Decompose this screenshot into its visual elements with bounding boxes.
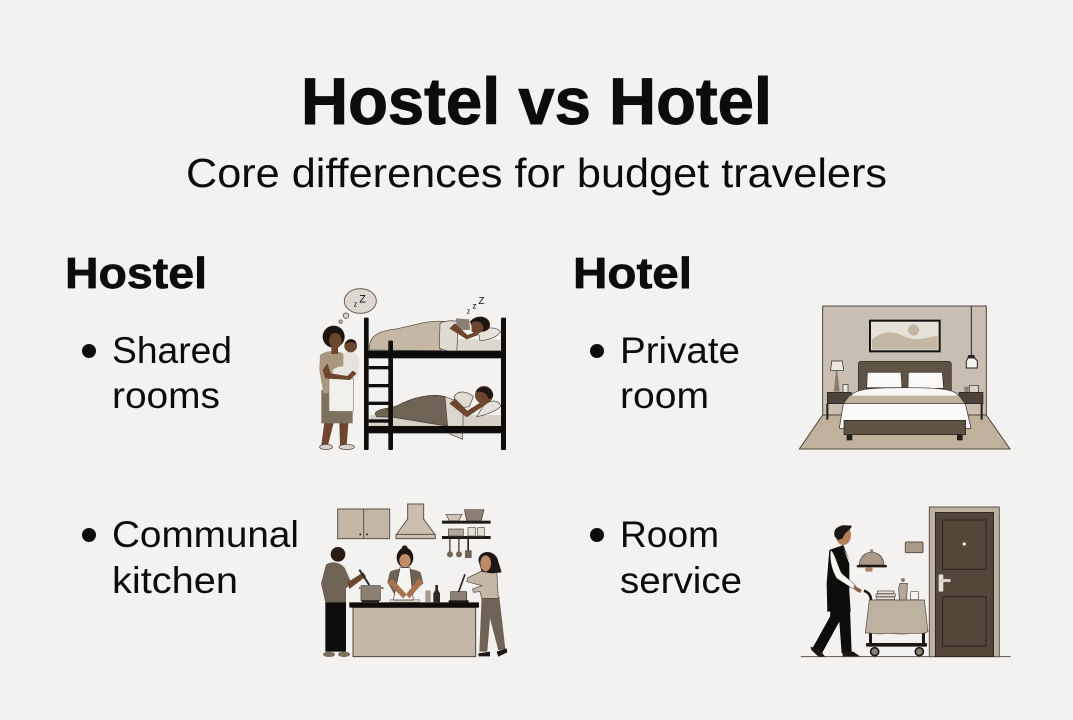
thought bubble: Z [359,294,366,306]
person center [387,545,423,600]
rug [799,415,1010,449]
person left [321,547,369,657]
range hood [396,504,435,539]
sleeping z marks: z [467,306,471,315]
bottom bunk [370,386,501,439]
bullet: communal kitchen: Communal [112,514,299,555]
bullet: room service: service [620,560,742,601]
panel: hotel [573,249,1011,657]
bullet: shared rooms: Shared [112,330,232,371]
subtitle: Core differences for budget travelers [186,150,887,196]
pendant lamp [966,306,977,368]
headboard [858,361,951,393]
icon: room service at door [801,507,1011,657]
bullet: communal kitchen: kitchen [112,560,238,601]
waiter [811,525,873,657]
floor line [801,655,1011,658]
heading: hostel: Hostel [65,249,207,298]
cart [864,578,928,656]
left nightstand with lamp [827,361,851,420]
bullet: room service: Room [620,514,719,555]
icon: communal kitchen scene [321,504,507,657]
pillows [867,372,944,388]
person right [459,552,507,657]
bed [839,388,971,440]
sleeping z marks: z [472,301,477,311]
heading: hotel: Hotel [573,249,692,298]
bullet: private room: Private [620,330,740,371]
top bunk [369,317,501,354]
icon: bunk bed with sleepers and parent [319,289,506,450]
bullet: shared rooms: rooms [112,375,220,416]
bed frame [364,318,506,450]
bullet: private room: room [620,375,709,416]
standing person with child [319,326,359,450]
icon: hotel bedroom [799,306,1010,449]
title: Hostel vs Hotel [301,64,772,138]
wall plate [905,542,923,553]
sleeping z marks [467,296,484,315]
framed picture [870,321,940,351]
island counter [349,602,479,657]
bullet: communal kitchen [82,514,299,601]
bullet: private room [590,330,740,416]
thought bubble [339,289,376,323]
wall [823,306,986,416]
wall cabinets [338,509,390,539]
bullet: shared rooms [82,330,232,416]
door [929,507,999,657]
panel: hostel [65,249,507,657]
pots and bottles [359,585,469,603]
cloche tray [857,549,887,567]
shelves with dishes and utensils [442,510,491,558]
sleeping z marks: Z [478,296,484,307]
right nightstand [959,385,983,420]
bullet: room service [590,514,742,601]
thought bubble: z [354,300,358,309]
